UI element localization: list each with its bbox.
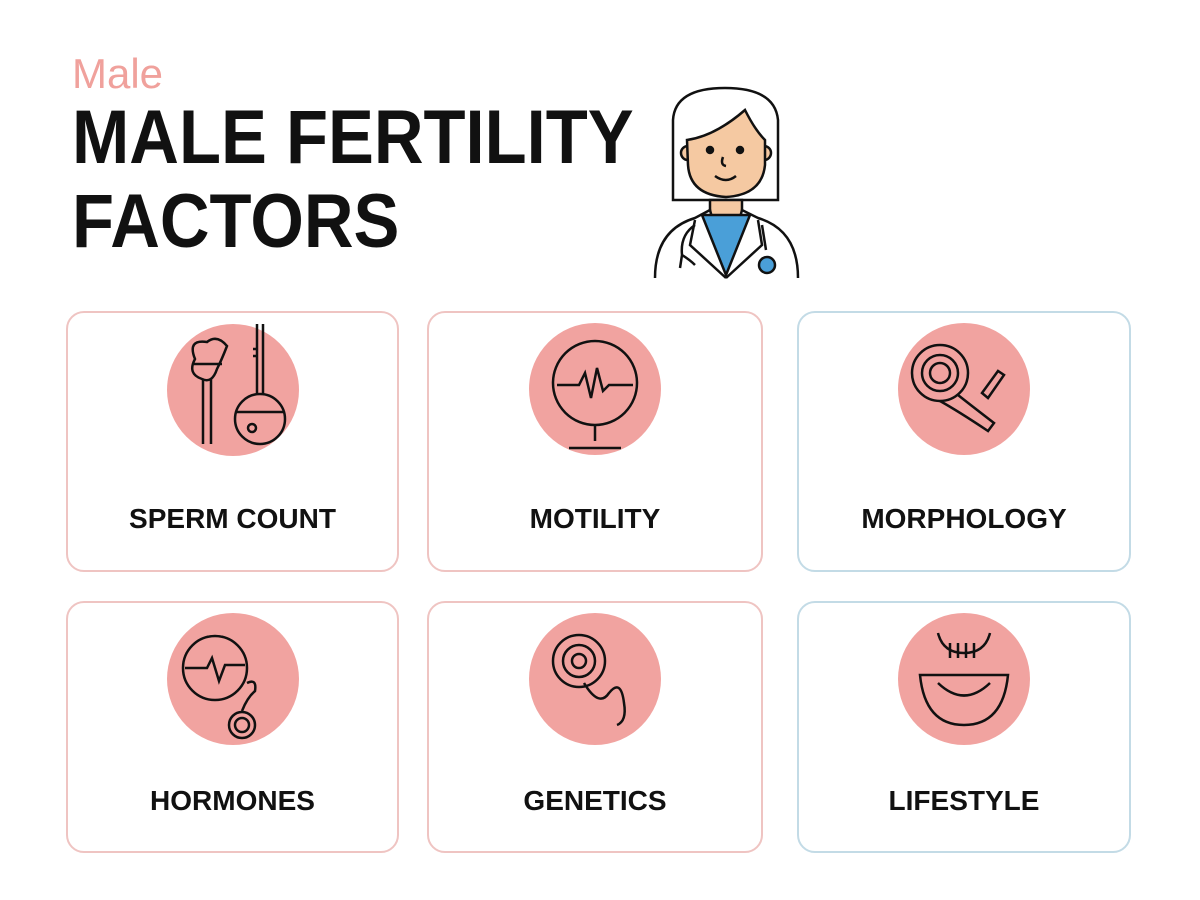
- title: [72, 95, 634, 264]
- panel: lifestyle: [797, 601, 1131, 853]
- label: SPERM COUNT: [129, 503, 336, 534]
- panel: motility: [427, 311, 763, 572]
- icon: spiral: [529, 613, 661, 745]
- label: MORPHOLOGY: [861, 503, 1067, 534]
- icon: cell: [898, 323, 1030, 455]
- panel: sperm count: [66, 311, 399, 572]
- icon: doctor: [654, 86, 800, 279]
- panel: hormones: [66, 601, 399, 853]
- title: FACTORS: [72, 179, 399, 264]
- icon: gauge: [166, 613, 298, 745]
- panel: morphology: [797, 311, 1131, 572]
- label: LIFESTYLE: [889, 785, 1039, 816]
- label: MOTILITY: [530, 503, 660, 534]
- label: GENETICS: [523, 785, 667, 816]
- label: HORMONES: [150, 785, 315, 816]
- subtitle: Male: [72, 50, 163, 97]
- title: MALE FERTILITY: [72, 95, 634, 180]
- icon: face: [898, 613, 1030, 745]
- icon: flasks: [166, 324, 298, 456]
- panel: genetics: [427, 601, 763, 853]
- icon: monitor: [529, 323, 661, 455]
